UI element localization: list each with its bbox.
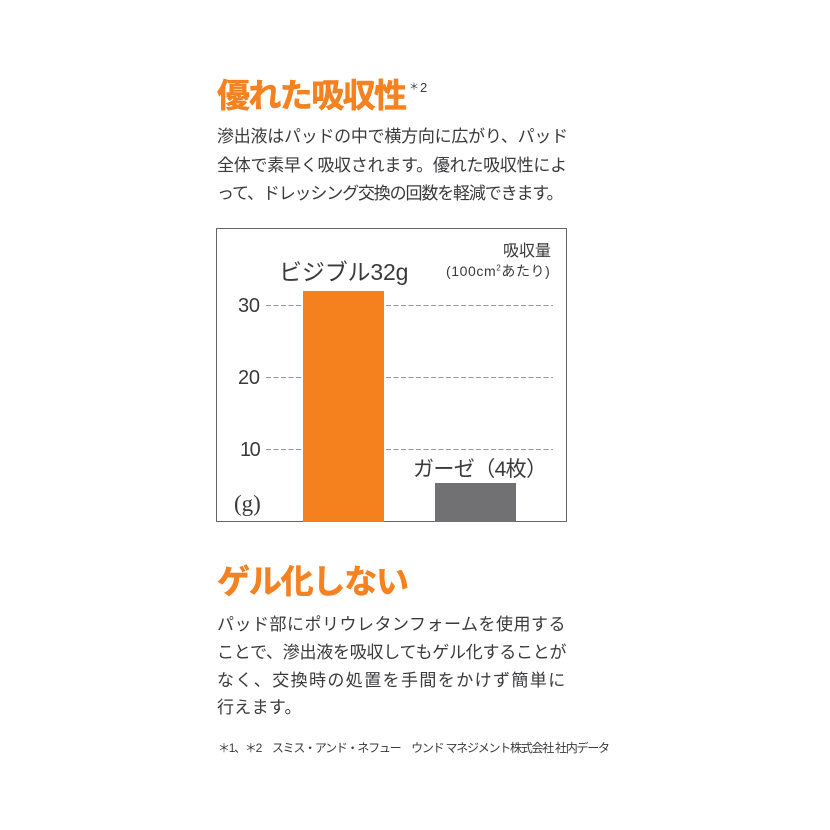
chart basis note: (100cm2あたり)	[446, 263, 550, 279]
chart unit note: 吸収量	[503, 243, 551, 260]
bar: gauze	[434, 482, 516, 522]
text block: no gel description: ことで、滲出液を吸収してもゲル化することが	[217, 643, 566, 662]
text block: no gel description	[217, 615, 567, 717]
footnote: ＊1、＊2 スミス・アンド・ネフュー ウンド マネジメント株式会社 社内データ	[218, 741, 609, 755]
axis unit: (g)	[234, 491, 261, 516]
label: Visible 32g: ビジブル32g	[279, 259, 408, 285]
label: gauze 4 sheets: ガーゼ（4枚）	[413, 458, 546, 481]
heading: superior absorbency: 優れた吸収性	[217, 77, 405, 114]
text block: absorbency description: 滲出液はパッドの中で横方向に広がり、パッド	[217, 127, 568, 146]
axis label 30: 30	[238, 295, 260, 317]
heading: does not gel: ゲル化しない	[217, 563, 408, 600]
text block: no gel description: パッド部にポリウレタンフォームを使用する	[217, 615, 566, 634]
footnote marker: 2	[420, 80, 427, 95]
footnote marker	[409, 80, 427, 95]
axis label 20: 20	[238, 367, 260, 389]
axis label 10: 10	[240, 439, 259, 461]
bar chart: absorption amount	[216, 228, 567, 522]
text block: absorbency description: って、ドレッシング交換の回数を軽減できます。	[217, 184, 562, 203]
footnote marker: ＊	[409, 82, 419, 93]
text block: no gel description: 行えます。	[217, 698, 302, 717]
text block: no gel description: なく、交換時の処置を手間をかけず簡単に	[217, 671, 567, 690]
text block: absorbency description	[217, 127, 568, 203]
text block: absorbency description: 全体で素早く吸収されます。優れた吸収性によ	[217, 156, 567, 175]
bar: Visible 32g	[302, 290, 384, 522]
